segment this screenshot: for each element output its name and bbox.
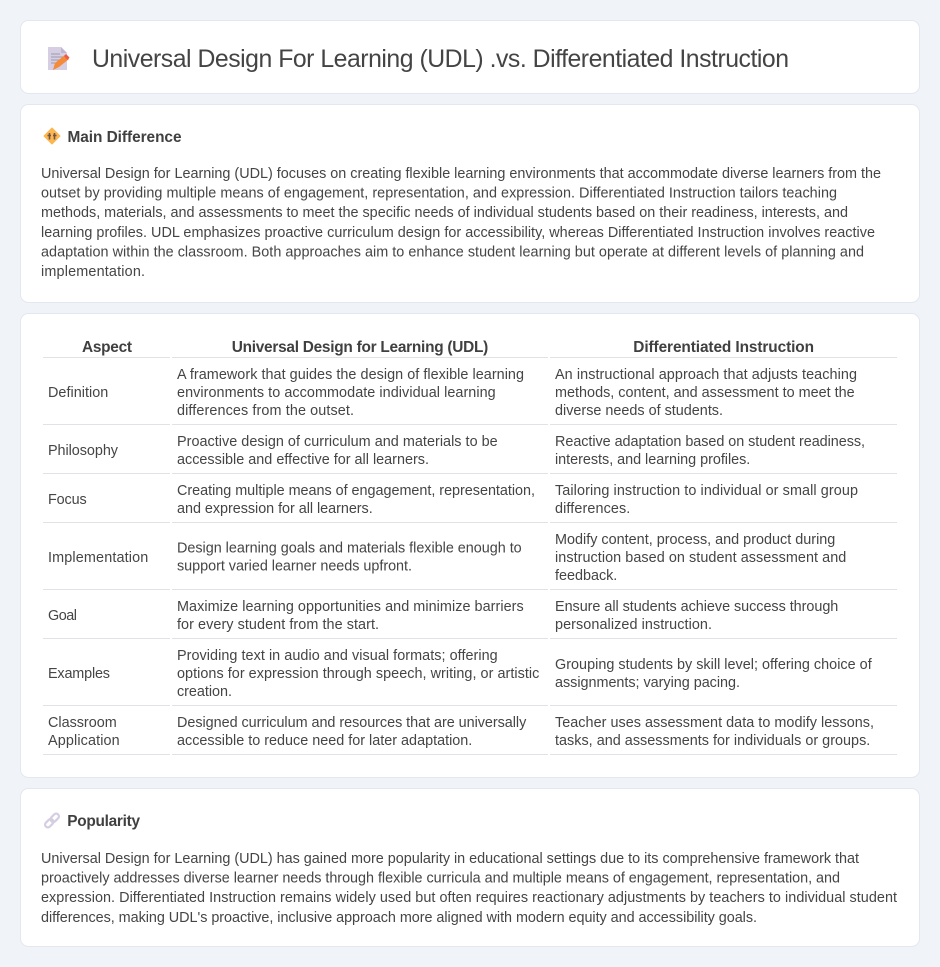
table row: implementation: Implementation [48, 550, 148, 566]
table row: implementation: feedback. [555, 568, 617, 584]
table row: definition: Definition [48, 385, 108, 401]
table row: definition: An instructional approach that adjusts teaching [555, 367, 857, 383]
text block: popularity: differences, making UDL's proactive, inclusive approach more aligned with modern equity and accessibility goals. [41, 910, 757, 926]
table row: examples: Grouping students by skill level; offering choice of [555, 657, 873, 673]
icon: orange diamond sign [44, 128, 60, 144]
title: Universal Design For Learning (UDL) .vs. Differentiated Instruction [92, 46, 789, 73]
text block: popularity: expression. Differentiated Instruction remains widely used but often requires reactionary adjustments by teachers to individual student [41, 890, 897, 906]
table row: focus: differences. [555, 501, 630, 517]
table row: classroom application: Application [48, 733, 120, 749]
table row: focus: and expression for all learners. [177, 501, 373, 517]
table row: philosophy: Philosophy [48, 443, 119, 459]
table row: goal: Ensure all students achieve success through [555, 599, 838, 615]
table header row [43, 339, 897, 358]
table row: philosophy: accessible and effective for all learners. [177, 452, 429, 468]
table row: definition: differences from the outset. [177, 403, 354, 419]
table row: focus [43, 483, 897, 523]
table row: classroom application: Classroom [48, 715, 117, 731]
table row: examples: assignments; varying pacing. [555, 675, 740, 691]
panel: popularity [20, 788, 920, 946]
table row: goal: personalized instruction. [555, 617, 712, 633]
table row: examples: Examples [48, 666, 110, 682]
table row: examples: creation. [177, 684, 232, 700]
table row: definition: environments to accommodate individual learning [177, 385, 496, 401]
table row: definition: methods, content, and assessment to meet the [555, 385, 855, 401]
table row: implementation: instruction based on student assessment and [555, 550, 846, 566]
table row: classroom application: Designed curriculum and resources that are universally [177, 715, 527, 731]
table row: focus: Tailoring instruction to individual or small group [555, 483, 858, 499]
table row: definition: diverse needs of students. [555, 403, 723, 419]
table row: goal: Goal [48, 608, 77, 624]
table row: implementation: support varied learner needs upfront. [177, 558, 412, 574]
text block: main difference: outset by providing multiple means of engagement, representation, and expression. Differentiated Instruction tailors teaching [41, 186, 837, 202]
table row: classroom application: tasks, and assessments for individuals or groups. [555, 733, 870, 749]
table row: implementation: Design learning goals and materials flexible enough to [177, 540, 522, 556]
heading: popularity: Popularity [67, 813, 140, 830]
table row: definition [43, 367, 897, 425]
panel: title header [20, 20, 920, 94]
table row: focus: Focus [48, 492, 87, 508]
table row: examples: Providing text in audio and visual formats; offering [177, 648, 498, 664]
text block: main difference: Universal Design for Learning (UDL) focuses on creating flexible learning environments that accommodate diverse learners from the [41, 166, 881, 182]
heading: main difference: Main Difference [68, 129, 182, 146]
text block: main difference [41, 166, 881, 280]
table row: examples: options for expression through speech, writing, or artistic [177, 666, 539, 682]
table row: philosophy: Proactive design of curriculum and materials to be [177, 434, 498, 450]
icon: document with pencil [48, 47, 70, 70]
table row: goal: Maximize learning opportunities and minimize barriers [177, 599, 524, 615]
table row: implementation [43, 532, 897, 590]
text block: main difference: adaptation within the classroom. Both approaches aim to enhance student learning but operate at different levels of planning and [41, 244, 864, 260]
table row: examples [43, 648, 897, 706]
table row: classroom application: Teacher uses assessment data to modify lessons, [555, 715, 874, 731]
icon: chain link [44, 812, 60, 829]
table row: classroom application [43, 715, 897, 755]
table row: philosophy [43, 434, 897, 474]
table row: definition: A framework that guides the design of flexible learning [177, 367, 524, 383]
text block: main difference: methods, materials, and assessments to meet the specific needs of individual students based on their readiness, interests, and [41, 205, 848, 221]
table row: philosophy: interests, and learning profiles. [555, 452, 750, 468]
table row: philosophy: Reactive adaptation based on student readiness, [555, 434, 865, 450]
table header row: Differentiated Instruction [633, 339, 814, 356]
table row: focus: Creating multiple means of engagement, representation, [177, 483, 535, 499]
panel: main difference [20, 104, 920, 302]
table row: goal: for every student from the start. [177, 617, 379, 633]
table header row: Universal Design for Learning (UDL) [232, 339, 488, 356]
text block: popularity [41, 851, 897, 926]
panel: comparison table [20, 314, 920, 778]
table row: classroom application: accessible to reduce need for later adaptation. [177, 733, 472, 749]
table row: implementation: Modify content, process, and product during [555, 532, 835, 548]
table header row: Aspect [82, 339, 132, 356]
text block: popularity: proactively addresses diverse learner needs through flexible curricula and multiple means of engagement, representation, and [41, 871, 840, 887]
text block: main difference: implementation. [41, 264, 145, 280]
table row: goal [43, 599, 897, 639]
text block: popularity: Universal Design for Learning (UDL) has gained more popularity in educational settings due to its comprehensive framework that [41, 851, 859, 867]
text block: main difference: learning profiles. UDL emphasizes proactive curriculum design for accessibility, whereas Differentiated Instruction involves reactive [41, 225, 875, 241]
